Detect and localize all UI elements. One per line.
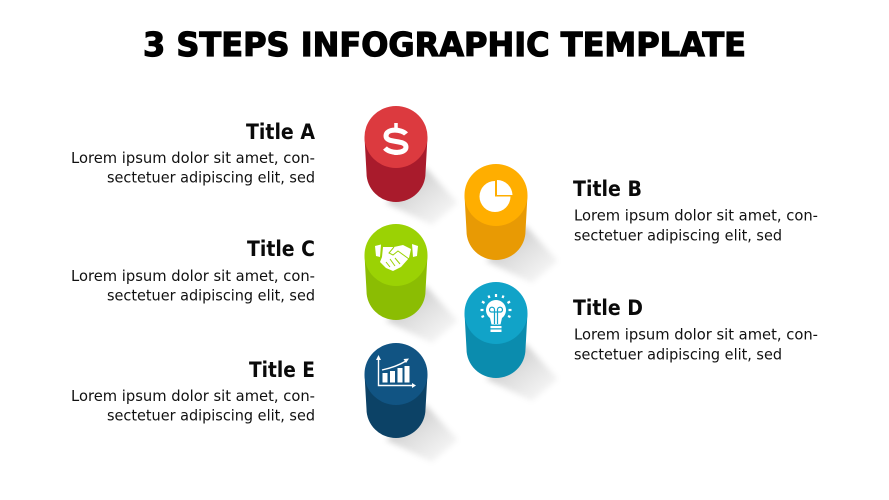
text block: Title D: Lorem ipsum dolor sit amet, con- — [574, 326, 818, 344]
shadow: navy — [386, 404, 458, 462]
text block: Title E: Title E — [249, 358, 315, 382]
body: teal — [464, 313, 528, 378]
top: orange — [464, 164, 528, 226]
text block: Title C — [71, 237, 315, 304]
title: 3 STEPS INFOGRAPHIC TEMPLATE — [143, 25, 746, 64]
top: navy — [364, 343, 428, 405]
cylinder: orange with pie chart icon — [464, 164, 558, 283]
text block: Title C: Lorem ipsum dolor sit amet, con- — [71, 267, 315, 285]
top: red — [364, 106, 428, 168]
cylinder: teal with light bulb icon — [464, 282, 558, 401]
cylinder: green with handshake icon — [364, 224, 458, 343]
text block: Title A — [71, 120, 316, 186]
icon: bar chart — [376, 355, 416, 388]
text block: Title B: sectetuer adipiscing elit, sed — [574, 226, 782, 244]
icon: handshake — [375, 244, 418, 271]
text block: Title C: sectetuer adipiscing elit, sed — [107, 286, 315, 304]
text block: Title E — [71, 358, 315, 424]
text block: Title B — [573, 177, 818, 244]
shadow: red — [386, 167, 458, 225]
text block: Title D: sectetuer adipiscing elit, sed — [574, 346, 782, 364]
text block: Title A: Lorem ipsum dolor sit amet, con- — [71, 149, 315, 167]
body: navy — [364, 374, 428, 438]
icon: light bulb — [480, 294, 512, 332]
text block: Title D — [573, 296, 818, 364]
text block: Title B: Lorem ipsum dolor sit amet, con- — [574, 206, 818, 224]
top: teal — [464, 282, 528, 344]
body: orange — [464, 195, 528, 260]
text block: Title C: Title C — [247, 237, 315, 261]
body: green — [364, 255, 428, 320]
text block: Title E: sectetuer adipiscing elit, sed — [107, 406, 315, 424]
top: green — [364, 224, 428, 286]
text block: Title A: Title A — [246, 120, 316, 144]
shadow: teal — [486, 343, 558, 401]
text block: Title A: sectetuer adipiscing elit, sed — [107, 168, 315, 186]
text block: Title E: Lorem ipsum dolor sit amet, con- — [71, 387, 315, 405]
body: red — [364, 137, 428, 202]
icon: dollar sign — [385, 123, 406, 155]
text block: Title D: Title D — [573, 296, 643, 320]
text block: Title B: Title B — [573, 177, 642, 201]
icon: pie chart — [480, 180, 512, 212]
cylinder: red with dollar icon — [364, 106, 458, 225]
shadow: green — [386, 285, 458, 343]
shadow: orange — [486, 225, 558, 283]
cylinder: navy with bar chart icon — [364, 343, 458, 462]
